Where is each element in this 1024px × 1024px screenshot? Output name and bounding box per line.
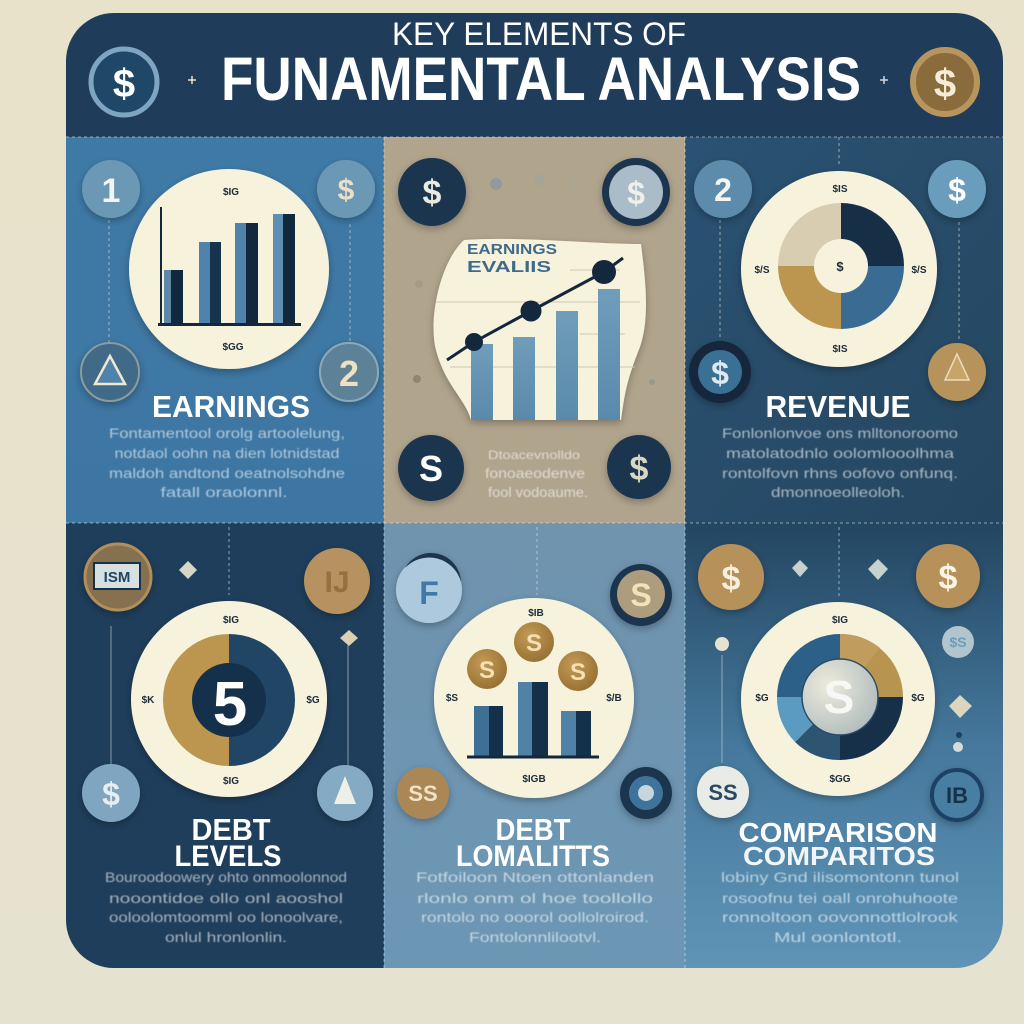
icon: gold dollar dark ring: S [630, 577, 652, 613]
text block: earnings: notdaol oohn na dien lotnidstad [114, 445, 340, 461]
icon: gold badge: ISM [104, 569, 130, 586]
small spots [413, 174, 655, 385]
heading: comparison: COMPARISON [738, 817, 938, 848]
icon: dollar coin dark [398, 158, 466, 226]
icon: white coin: SS [708, 780, 738, 805]
icon: dollar coin right: $ [630, 450, 649, 488]
icon: dollar coin right [607, 435, 671, 499]
text block: debt levels: onlul hronlonlin. [165, 929, 287, 945]
text block: debt localities: rontolo no ooorol oollolroirod. [421, 909, 649, 925]
icon: number 2 badge [694, 160, 752, 218]
icon: number 2 badge: 2 [714, 172, 732, 208]
heading: earnings: EARNINGS [152, 389, 310, 424]
chart: revenue donut: $IS [832, 344, 848, 355]
heading: debt levels: DEBT [192, 812, 271, 847]
icon: dark square coin: IB [946, 783, 968, 808]
chart: revenue donut: $ [836, 259, 844, 274]
icon: dollar coin light: $ [627, 175, 645, 211]
chart: coins over bars [434, 598, 634, 798]
chart: coins over bars: S [526, 630, 542, 657]
heading: debt localities: DEBT [496, 812, 571, 847]
chart: debt level donut: $IG [223, 776, 239, 787]
chart: revenue donut: $/S [911, 265, 927, 276]
icon: dollar dark coin: $ [711, 355, 729, 391]
chart: revenue donut: $/S [754, 265, 770, 276]
text block: evaluation: fonoaeodenve [485, 465, 585, 481]
text block: debt levels: Bouroodoowery ohto onmoolonnod [105, 869, 347, 885]
chart: coins over bars: S [570, 659, 586, 686]
chart: coins over bars: S [479, 657, 495, 684]
line with markers [447, 258, 623, 360]
text block: revenue: matolatodnlo oolomlooolhma [726, 445, 954, 461]
panel: debt localities [384, 523, 685, 968]
text block: debt localities: Fontolonnlilootvl. [469, 929, 601, 945]
icon: S coin [398, 435, 464, 501]
icon: small diamond right [340, 630, 358, 646]
chart: comparison donut: $GG [829, 774, 851, 785]
heading: debt localities: LOMALITTS [456, 840, 610, 873]
icon: bronze coin [397, 767, 449, 819]
chart: coins over bars: $IB [528, 608, 544, 619]
text block: debt levels: ooloolomtoomml oo lonoolvare, [109, 909, 343, 925]
icon: triangle badge [81, 343, 139, 401]
text block: comparison [721, 869, 959, 945]
icon: bronze coin [304, 548, 370, 614]
text block: debt levels: nooontidoe ollo onl aooshol [109, 890, 343, 906]
icon: small diamonds [715, 559, 972, 752]
icon: triangle badge [317, 765, 373, 821]
chart: coins over bars: $IGB [522, 774, 546, 785]
icon: dollar badge [928, 160, 986, 218]
icon: bronze coin: SS [408, 781, 438, 806]
text block: comparison: rosoofnu tei oall onrohuhoote [722, 890, 958, 906]
chart: evaluation paper: EVALIIS [467, 259, 551, 276]
heading: key elements of: KEY ELEMENTS OF [392, 16, 686, 52]
text block: revenue: rontolfovn rhns oofovo onfunq. [722, 465, 958, 481]
icon: gold dollar coin [913, 50, 977, 114]
text block: comparison: lobiny Gnd ilisomontonn tunol [721, 869, 959, 885]
icon: sparkle left [188, 76, 196, 84]
panel: revenue [685, 137, 1003, 523]
text block: debt localities: Fotfoiloon Ntoen ottonlanden [416, 869, 654, 885]
panel: earnings [66, 137, 384, 523]
text block: earnings: maldoh andtond oeatnolsohdne [109, 465, 345, 481]
chart: debt level donut: $IG [223, 615, 239, 626]
icon: gold dollar coin [698, 544, 764, 610]
icon: number 2 badge [320, 343, 378, 401]
text block: revenue: dmonnoeolleoloh. [771, 484, 905, 500]
text block: comparison: ronnoltoon oovonnottlolrook [722, 909, 959, 925]
text block: earnings: Fontamentool orolg artoolelung, [109, 425, 345, 441]
icon: gold badge [85, 544, 151, 610]
chart: comparison donut: S [824, 671, 854, 723]
text block: earnings: fatall oraolonnl. [160, 484, 288, 500]
title: funamental analysis: FUNAMENTAL ANALYSIS [221, 45, 861, 113]
icon: gold dollar coin: $ [934, 62, 956, 106]
icon: dollar badge: $ [102, 776, 120, 812]
panel: earnings evaluation [384, 137, 685, 523]
icon: dark square coin [932, 770, 982, 820]
text block: debt localities: rlonlo onm ol hoe toollollo [417, 890, 653, 906]
chart: comparison donut: $IG [832, 615, 848, 626]
icon: dollar badge [317, 160, 375, 218]
text block: earnings [109, 425, 345, 500]
icon: S coin: S [419, 448, 443, 489]
icon: sparkle right [880, 76, 888, 84]
icon: gold dollar coin right: $ [939, 559, 958, 597]
icon: blue dollar coin [91, 49, 157, 115]
text block: evaluation: Dtoacevnolldo [488, 448, 580, 462]
chart: evaluation paper [434, 239, 646, 420]
icon: blue dollar coin: $ [113, 62, 135, 106]
chart: coins over bars: $/B [606, 693, 622, 704]
panel: debt levels [66, 523, 384, 968]
icon: dollar badge: $ [338, 174, 355, 207]
text block: comparison: Mul oonlontotl. [774, 929, 902, 945]
icon: number 1 badge: 1 [102, 172, 120, 210]
chart: comparison donut [741, 602, 935, 796]
icon: dollar coin dark: $ [423, 174, 442, 212]
chart: coins over bars: $S [446, 693, 458, 704]
icon: faded coin: $S [949, 634, 967, 650]
icon: light blue coin [396, 553, 462, 623]
panel: comparison [685, 523, 1003, 968]
icon: triangle gold coin [928, 343, 986, 401]
icon: gold dollar dark ring [610, 564, 672, 626]
icon: number 2 badge: 2 [339, 353, 359, 394]
chart: debt level donut: 5 [213, 670, 247, 739]
heading: comparison [738, 817, 938, 871]
heading: revenue: REVENUE [766, 389, 910, 424]
chart: earnings bar chart: $IG [223, 187, 239, 198]
text block: debt levels [105, 869, 347, 945]
icon: small diamond [179, 561, 197, 579]
chart: evaluation paper: EARNINGS [467, 241, 557, 258]
chart: debt level donut: $G [306, 695, 320, 706]
chart: debt level donut [131, 601, 327, 797]
chart: revenue donut [741, 171, 937, 367]
chart: comparison donut: $G [755, 693, 769, 704]
icon: faded coin [942, 626, 974, 658]
panel dividers [66, 137, 1003, 968]
icon: bronze coin: IJ [324, 566, 350, 599]
icon: gold dollar coin right [916, 544, 980, 608]
heading: debt localities [456, 812, 610, 873]
chart: earnings bar chart: $GG [222, 342, 244, 353]
text block: evaluation: fool vodoaume. [488, 484, 588, 500]
icon: dollar dark coin [689, 341, 751, 403]
icon: gold dollar coin: $ [722, 560, 741, 598]
icon: number 1 badge [82, 160, 140, 218]
icon: dark ring coin [620, 767, 672, 819]
icon: dollar badge: $ [948, 172, 966, 208]
header band [66, 13, 1003, 137]
chart: earnings bar chart [129, 169, 329, 369]
icon: dollar badge [82, 764, 140, 822]
text block: evaluation [485, 448, 588, 500]
icon: light blue coin: F [419, 575, 439, 611]
heading: comparison: COMPARITOS [743, 841, 935, 871]
chart: comparison donut: $G [911, 693, 925, 704]
heading: debt levels [176, 819, 280, 866]
text block: revenue [722, 425, 958, 500]
heading: debt levels: LEVELS [174, 840, 282, 873]
chart: revenue donut: $IS [832, 184, 848, 195]
chart: debt level donut: $K [142, 695, 155, 706]
text block: debt localities [416, 869, 654, 945]
icon: white coin [697, 766, 749, 818]
icon: dollar coin light [602, 158, 670, 226]
text block: revenue: Fonlonlonvoe ons mlltonoroomo [722, 425, 958, 441]
